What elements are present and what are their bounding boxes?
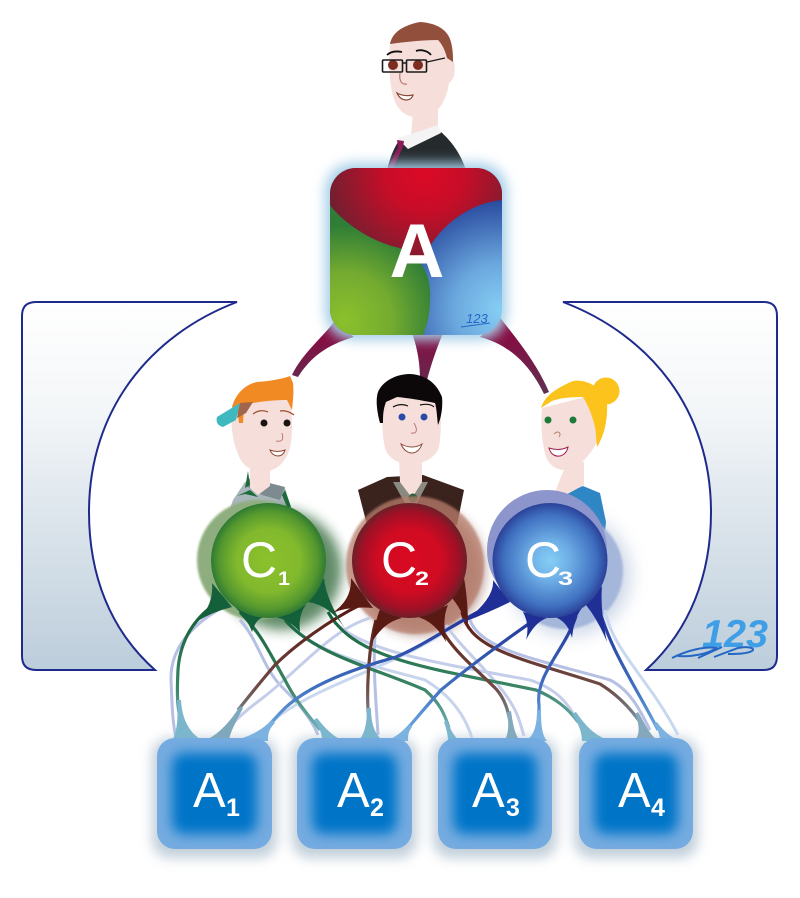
nose (411, 423, 416, 433)
letter A: A (390, 209, 444, 294)
hair (232, 376, 293, 423)
circle: C2: C (381, 532, 417, 588)
glasses and eyes (382, 50, 445, 72)
circle: C1: 1 (278, 569, 290, 590)
tile: A (325, 163, 507, 340)
shirt (226, 480, 292, 530)
face (232, 398, 292, 471)
nose (400, 73, 407, 84)
signature: 123 (672, 613, 768, 658)
hair (377, 374, 442, 425)
neck (553, 462, 584, 498)
mouth (549, 447, 568, 456)
person: C1 man (217, 376, 294, 530)
connectors: C2 brown (238, 605, 640, 722)
person: C3 woman (541, 378, 620, 540)
bun (592, 378, 620, 404)
eyes (398, 414, 406, 420)
panel: right bracket (563, 302, 777, 670)
collar (246, 478, 285, 500)
C1 flares (196, 578, 346, 632)
tie (388, 140, 404, 168)
neck (399, 458, 422, 498)
jacket (387, 132, 466, 170)
box: A3: 3 (506, 794, 520, 822)
connectors: C1 green (177, 600, 578, 730)
box: A4: A (618, 764, 651, 818)
circle: C3: C (525, 532, 561, 588)
person: C2 man (358, 374, 464, 525)
hair (390, 22, 453, 62)
straps (237, 471, 291, 507)
tile signature: 123 (466, 311, 488, 326)
connectors: A to team members (292, 316, 549, 394)
hair (541, 381, 607, 447)
box: A3: A (472, 764, 505, 818)
aura: C3 (487, 490, 630, 635)
vest (358, 475, 464, 525)
tile colours (330, 168, 502, 335)
circle: C3 (492, 503, 608, 618)
connector flares at boxes (172, 700, 681, 741)
circle: C3: 3 (558, 569, 573, 590)
box: A1: A (193, 764, 226, 818)
shirt (550, 486, 606, 540)
circle: C1: C (241, 532, 277, 588)
person: manager (382, 22, 466, 170)
box: A2: 2 (370, 794, 384, 822)
box: A4 (579, 738, 693, 849)
connectors: C3 blue (266, 602, 658, 730)
brows (393, 404, 434, 407)
eyes (260, 420, 268, 426)
neck (410, 105, 438, 145)
nose (276, 433, 283, 441)
box shadows (152, 738, 698, 858)
box: A1: 1 (226, 794, 240, 822)
eyes (544, 416, 552, 424)
C2 flares (332, 578, 468, 642)
aura: C2 (346, 496, 484, 634)
connector flares at circles (196, 578, 607, 642)
C3 flares (464, 580, 607, 642)
box: A2 (297, 738, 412, 849)
tile glow (325, 163, 507, 340)
neck (250, 465, 270, 495)
connectors: pale echoes (171, 606, 678, 738)
face (541, 397, 600, 470)
circle: C1 (211, 503, 326, 618)
button (408, 494, 418, 502)
aura: C1 (197, 500, 342, 630)
collar (397, 125, 441, 149)
shirt (393, 482, 428, 505)
pencil (217, 402, 253, 427)
circle: C2 (352, 503, 467, 618)
mouth (397, 93, 413, 100)
mouth (270, 450, 285, 456)
box: A4: 4 (651, 794, 665, 822)
box: A1 (157, 738, 272, 849)
face (382, 396, 441, 464)
mouth (401, 444, 422, 453)
nose (554, 432, 560, 437)
brows (253, 411, 294, 415)
signature: 123: 123 (702, 613, 768, 656)
panel: left bracket (22, 302, 237, 670)
box: A2: A (337, 764, 370, 818)
face (389, 38, 455, 117)
box: A3 (438, 738, 552, 849)
circle: C2: 2 (415, 569, 429, 590)
